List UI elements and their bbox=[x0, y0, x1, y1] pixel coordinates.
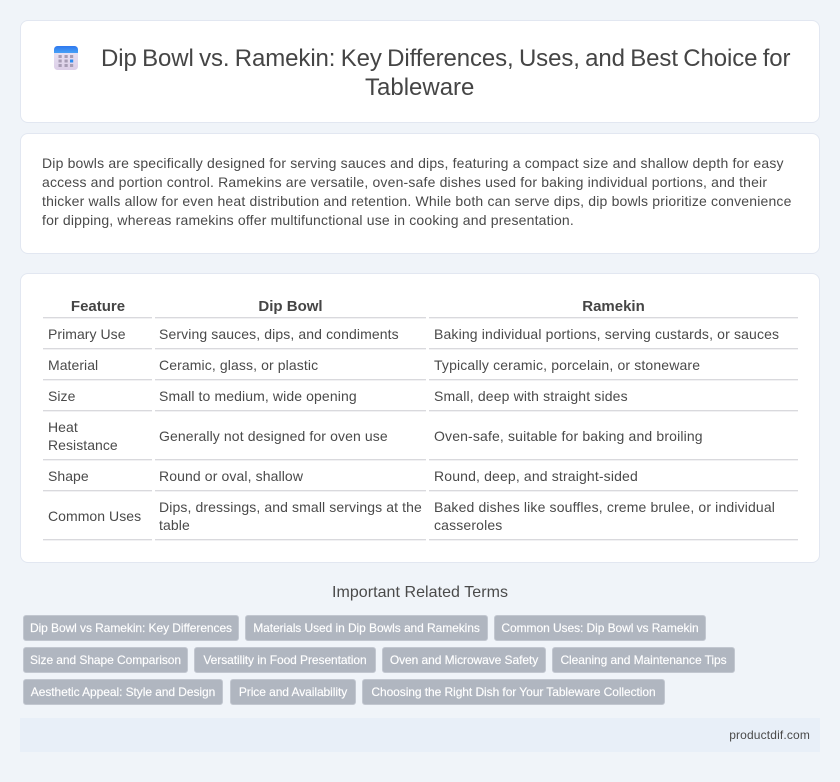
row: size: Small, deep with straight sides bbox=[434, 388, 628, 404]
source: productdif.com bbox=[729, 728, 810, 742]
intro text: for dipping, whereas ramekins offer multifunctional use in cooking and presentation. bbox=[42, 212, 574, 228]
row: heat resistance: Generally not designed for oven use bbox=[159, 428, 388, 444]
row: common uses: casseroles bbox=[434, 517, 502, 533]
intro text: access and portion control. Ramekins are versatile, oven-safe dishes used for baking individual portions, and their bbox=[42, 174, 767, 190]
row: common uses: Baked dishes like souffles, creme brulee, or individual bbox=[434, 499, 775, 515]
panel: introduction bbox=[20, 133, 820, 254]
row: shape: Round or oval, shallow bbox=[159, 468, 303, 484]
row: material: Ceramic, glass, or plastic bbox=[159, 357, 318, 373]
row: primary use: Serving sauces, dips, and condiments bbox=[159, 326, 399, 342]
related term tags: Oven and Microwave Safety bbox=[390, 653, 538, 667]
related term tags: Versatility in Food Presentation bbox=[203, 653, 367, 667]
row: shape: Shape bbox=[48, 468, 89, 484]
row: material: Material bbox=[48, 357, 98, 373]
related term tags: Common Uses: Dip Bowl vs Ramekin bbox=[501, 621, 699, 635]
row: shape bbox=[48, 468, 638, 484]
related term tags: Materials Used in Dip Bowls and Ramekins bbox=[253, 621, 480, 635]
related term tags: Aesthetic Appeal: Style and Design bbox=[31, 685, 215, 699]
intro text: Dip bowls are specifically designed for serving sauces and dips, featuring a compact size and shallow depth for easy bbox=[42, 155, 784, 171]
row: heat resistance bbox=[48, 419, 703, 453]
footer bbox=[20, 718, 820, 752]
table header bbox=[71, 298, 645, 315]
row: primary use: Baking individual portions, serving custards, or sauces bbox=[434, 326, 779, 342]
table header: Ramekin bbox=[582, 298, 645, 315]
panel: comparison table bbox=[20, 273, 820, 563]
related term tags: Price and Availability bbox=[239, 685, 347, 699]
row: primary use bbox=[48, 326, 779, 342]
row lines bbox=[43, 317, 798, 541]
row: common uses: Dips, dressings, and small servings at the bbox=[159, 499, 422, 515]
row: size: Size bbox=[48, 388, 75, 404]
related term tags: Choosing the Right Dish for Your Tableware Collection bbox=[371, 685, 656, 699]
related term tags: Size and Shape Comparison bbox=[30, 653, 181, 667]
row: heat resistance: Oven-safe, suitable for baking and broiling bbox=[434, 428, 703, 444]
related term tags: Cleaning and Maintenance Tips bbox=[560, 653, 727, 667]
row: material bbox=[48, 357, 700, 373]
intro text bbox=[42, 155, 792, 228]
table header: Dip Bowl bbox=[258, 298, 323, 315]
row: material: Typically ceramic, porcelain, or stoneware bbox=[434, 357, 700, 373]
heading: related terms: Important Related Terms bbox=[332, 584, 508, 601]
heading bbox=[101, 45, 790, 101]
row: common uses: table bbox=[159, 517, 190, 533]
row: heat resistance: Heat bbox=[48, 419, 78, 435]
related term tags bbox=[23, 615, 735, 705]
row: heat resistance: Resistance bbox=[48, 437, 118, 453]
icon: calendar bbox=[54, 46, 78, 70]
row: common uses bbox=[48, 499, 775, 533]
panel: title bbox=[20, 20, 820, 123]
heading: Tableware bbox=[365, 74, 474, 101]
table header: Feature bbox=[71, 298, 125, 315]
related term tags: Dip Bowl vs Ramekin: Key Differences bbox=[30, 621, 232, 635]
row: primary use: Primary Use bbox=[48, 326, 126, 342]
row: shape: Round, deep, and straight-sided bbox=[434, 468, 638, 484]
row: common uses: Common Uses bbox=[48, 508, 141, 524]
heading: Dip Bowl vs. Ramekin: Key Differences, Uses, and Best Choice for bbox=[101, 45, 790, 72]
row: size bbox=[48, 388, 628, 404]
row: size: Small to medium, wide opening bbox=[159, 388, 357, 404]
intro text: thicker walls allow for even heat distribution and retention. While both can serve dips, dip bowls prioritize convenience bbox=[42, 193, 792, 209]
